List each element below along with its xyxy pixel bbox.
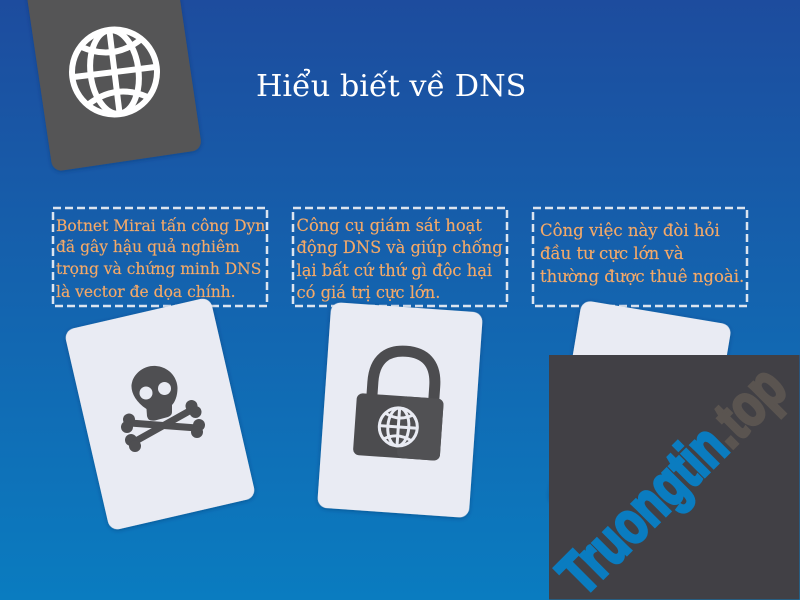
watermark panel: [545, 353, 800, 600]
text box: Mirai botnet: Botnet Mirai tấn công Dyn: [56, 217, 265, 235]
icon: small globe: [378, 407, 419, 447]
text box: outsourced work: [533, 208, 747, 306]
text box: Mirai botnet: [53, 208, 267, 306]
icon: skull: [121, 366, 205, 452]
text box: DNS monitoring tools: động DNS và giúp chống: [296, 238, 503, 257]
text box: Mirai botnet: trọng và chứng minh DNS: [56, 260, 261, 278]
icon: padlock: [353, 348, 447, 461]
text box: outsourced work: Công việc này đòi hỏi: [540, 221, 720, 240]
text box: outsourced work: thường được thuê ngoài.: [540, 267, 744, 286]
text box: DNS monitoring tools: có giá trị cực lớn.: [296, 283, 440, 302]
text box: Mirai botnet: đã gây hậu quả nghiêm: [56, 238, 240, 256]
dark card with globe icon: [23, 0, 202, 172]
card: padlock with globe: [317, 302, 483, 518]
text box: DNS monitoring tools: Công cụ giám sát hoạt: [296, 216, 482, 235]
text box: Mirai botnet: là vector đe dọa chính.: [56, 283, 236, 301]
text box: DNS monitoring tools: [293, 208, 507, 306]
title: Hiểu biết về DNS: [256, 68, 526, 104]
text box: DNS monitoring tools: lại bất cứ thứ gì độc hại: [296, 261, 492, 280]
text box: outsourced work: đầu tư cực lớn và: [540, 244, 684, 263]
card: skull and crossbones: [64, 297, 256, 531]
card: partly hidden third card: [548, 300, 732, 528]
icon: globe: [67, 25, 162, 119]
